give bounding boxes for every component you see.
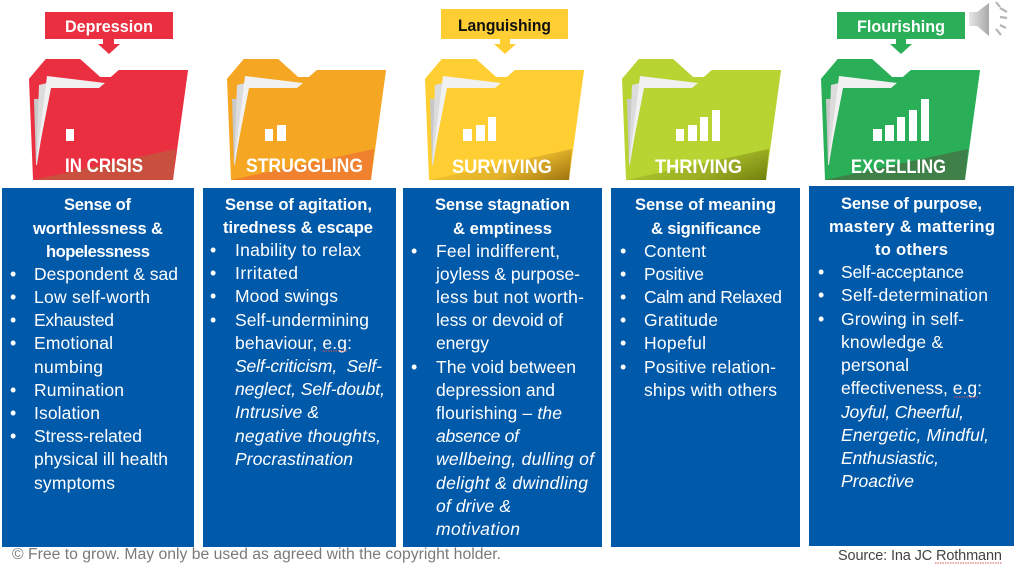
list: Surviving symptoms: energy: [436, 333, 489, 353]
list: In Crisis symptoms: Low self-worth: [34, 287, 150, 307]
folder: Excelling: [822, 60, 980, 180]
tag: Languishing: Languishing: [458, 16, 551, 35]
list: Thriving qualities: Positive relation-: [644, 357, 776, 377]
list: Surviving symptoms: less or devoid of: [436, 310, 563, 330]
list: In Crisis symptoms: Exhausted: [34, 310, 114, 330]
list: Surviving symptoms: [411, 241, 596, 539]
heading: Struggling: Sense of agitation,: [225, 195, 372, 214]
list: Excelling qualities: Enthusiastic,: [841, 448, 939, 468]
list: Thriving qualities: •: [620, 310, 626, 330]
list: Struggling symptoms: Irritated: [235, 263, 298, 283]
panel: Thriving: [611, 188, 800, 547]
panel: Excelling: [809, 186, 1014, 546]
folder: Thriving: [622, 60, 780, 180]
heading: Thriving: & significance: [651, 219, 761, 238]
list: Surviving symptoms: delight & dwindling: [436, 473, 588, 493]
list: Thriving qualities: Content: [644, 241, 706, 261]
panel: In Crisis: [2, 188, 194, 547]
list: In Crisis symptoms: •: [10, 264, 16, 284]
list: In Crisis symptoms: [10, 264, 178, 493]
list: Excelling qualities: •: [818, 285, 824, 305]
list: Thriving qualities: Hopeful: [644, 333, 706, 353]
list: In Crisis symptoms: •: [10, 333, 16, 353]
list: Excelling qualities: Energetic, Mindful,: [841, 425, 989, 445]
list: In Crisis symptoms: •: [10, 380, 16, 400]
list: Surviving symptoms: less but not worth-: [436, 287, 584, 307]
list: Thriving qualities: •: [620, 264, 626, 284]
heading: Thriving: [635, 195, 776, 238]
source credit: Source: Ina JC Rothmann: [838, 548, 1002, 564]
tag: Languishing: [441, 9, 568, 54]
heading: In Crisis: hopelessness: [46, 242, 150, 261]
heading: Surviving: & emptiness: [453, 219, 552, 238]
list: Thriving qualities: •: [620, 287, 626, 307]
list: Struggling symptoms: Self-criticism, Self-: [235, 356, 382, 376]
list: Excelling qualities: Self-determination: [841, 285, 988, 305]
list: Excelling qualities: •: [818, 309, 824, 329]
list: In Crisis symptoms: •: [10, 403, 16, 423]
folder: In Crisis: IN CRISIS: [65, 156, 143, 177]
list: Excelling qualities: knowledge &: [841, 332, 943, 352]
list: Surviving symptoms: •: [411, 357, 417, 377]
list: Surviving symptoms: depression and: [436, 380, 555, 400]
list: Excelling qualities: Joyful, Cheerful,: [840, 402, 964, 422]
list: Surviving symptoms: Feel indifferent,: [436, 241, 560, 261]
list: Thriving qualities: •: [620, 241, 626, 261]
list: Struggling symptoms: Inability to relax: [235, 240, 361, 260]
folder: Struggling: [228, 60, 386, 180]
heading: Struggling: [223, 195, 373, 237]
folder: Excelling: EXCELLING: [851, 157, 946, 178]
list: Struggling symptoms: Self-undermining: [235, 310, 369, 330]
tag: Flourishing: [837, 12, 965, 54]
list: In Crisis symptoms: Despondent & sad: [34, 264, 178, 284]
heading: Surviving: Sense stagnation: [435, 195, 570, 214]
copyright note: © Free to grow. May only be used as agreed with the copyright holder.: [12, 546, 501, 563]
folder: Surviving: [426, 60, 584, 180]
list: In Crisis symptoms: •: [10, 310, 16, 330]
heading: Excelling: to others: [875, 240, 948, 259]
list: In Crisis symptoms: Emotional: [34, 333, 113, 353]
tag: Flourishing: Flourishing: [857, 17, 945, 36]
list: Struggling symptoms: negative thoughts,: [235, 426, 381, 446]
list: In Crisis symptoms: symptoms: [34, 473, 115, 493]
list: Surviving symptoms: flourishing – the: [436, 403, 562, 423]
list: Excelling qualities: effectiveness, e.g:: [841, 378, 982, 398]
list: Surviving symptoms: of drive &: [436, 496, 511, 516]
heading: In Crisis: Sense of: [64, 195, 131, 214]
folder: Thriving: THRIVING: [655, 157, 742, 178]
tag: Depression: Depression: [65, 17, 153, 36]
folder: Struggling: STRUGGLING: [246, 156, 363, 177]
panel: Struggling: [203, 188, 396, 547]
list: Thriving qualities: Gratitude: [644, 310, 718, 330]
list: Thriving qualities: [620, 241, 782, 400]
list: Struggling symptoms: •: [210, 263, 216, 283]
heading: Excelling: Sense of purpose,: [841, 194, 982, 213]
list: Excelling qualities: •: [818, 262, 824, 282]
list: Surviving symptoms: motivation: [436, 519, 520, 539]
list: Thriving qualities: •: [620, 333, 626, 353]
list: Thriving qualities: ships with others: [644, 380, 777, 400]
list: Surviving symptoms: wellbeing, dulling of: [436, 449, 596, 469]
heading: Excelling: mastery & mattering: [829, 217, 995, 236]
heading: Struggling: tiredness & escape: [223, 218, 373, 237]
list: In Crisis symptoms: •: [10, 287, 16, 307]
list: Struggling symptoms: Intrusive &: [235, 402, 319, 422]
list: Struggling symptoms: behaviour, e.g:: [235, 333, 352, 353]
list: Surviving symptoms: •: [411, 241, 417, 261]
list: Struggling symptoms: •: [210, 286, 216, 306]
list: In Crisis symptoms: •: [10, 426, 16, 446]
list: Excelling qualities: personal: [841, 355, 909, 375]
list: Surviving symptoms: The void between: [436, 357, 576, 377]
list: Struggling symptoms: neglect, Self-doubt,: [235, 379, 385, 399]
folder: Surviving: SURVIVING: [452, 157, 552, 178]
list: Thriving qualities: •: [620, 357, 626, 377]
heading: Excelling: [829, 194, 995, 259]
panel: Surviving: [403, 188, 602, 547]
list: In Crisis symptoms: Rumination: [34, 380, 124, 400]
heading: In Crisis: worthlessness &: [32, 219, 163, 238]
list: In Crisis symptoms: physical ill health: [34, 449, 168, 469]
list: Struggling symptoms: •: [210, 310, 216, 330]
list: Struggling symptoms: Mood swings: [235, 286, 338, 306]
list: Thriving qualities: Calm and Relaxed: [644, 287, 782, 307]
list: In Crisis symptoms: Stress-related: [34, 426, 142, 446]
list: Struggling symptoms: Procrastination: [235, 449, 353, 469]
list: Excelling qualities: [818, 262, 989, 491]
list: Surviving symptoms: joyless & purpose-: [435, 264, 580, 284]
heading: Thriving: Sense of meaning: [635, 195, 776, 214]
heading: In Crisis: [32, 195, 163, 261]
list: Surviving symptoms: absence of: [436, 426, 521, 446]
icon: speaker: [969, 2, 1007, 36]
list: In Crisis symptoms: Isolation: [34, 403, 100, 423]
list: Thriving qualities: Positive: [644, 264, 704, 284]
list: Excelling qualities: Proactive: [841, 471, 914, 491]
list: Struggling symptoms: •: [210, 240, 216, 260]
list: Excelling qualities: Self-acceptance: [841, 262, 964, 282]
folder: In Crisis: [30, 60, 188, 180]
list: Struggling symptoms: [210, 240, 385, 469]
tag: Depression: [45, 12, 173, 54]
list: Excelling qualities: Growing in self-: [841, 309, 964, 329]
list: In Crisis symptoms: numbing: [34, 357, 103, 377]
heading: Surviving: [435, 195, 570, 238]
